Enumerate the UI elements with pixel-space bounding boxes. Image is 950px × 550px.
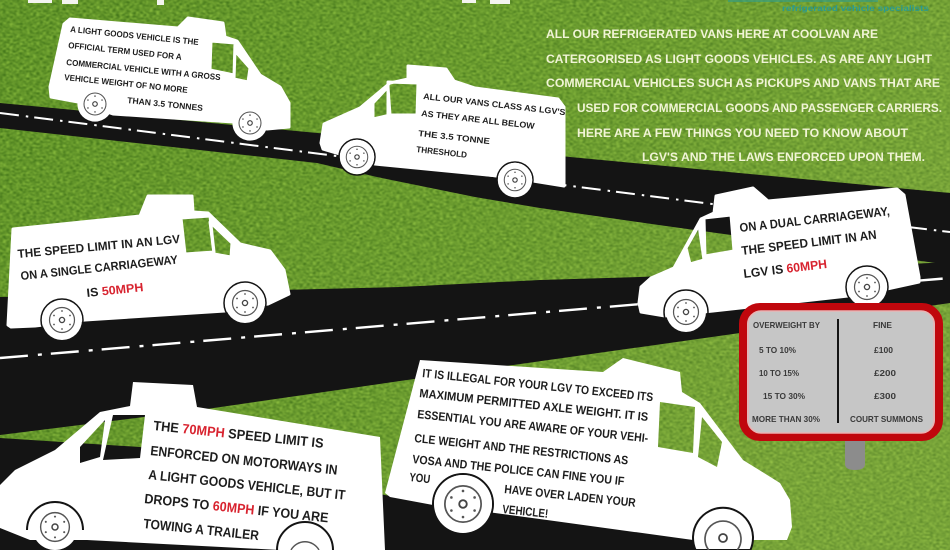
tagline: company logo text: refrigerated vehicle specialists — [782, 3, 929, 13]
van 6: axle weight warning: HAVE OVER LADEN YOUR — [504, 482, 637, 510]
sign: overweight fines table: 15 TO 30% — [763, 391, 805, 401]
van 6: axle weight warning: IT IS ILLEGAL FOR YOUR LGV TO EXCEED ITS — [422, 366, 654, 404]
van 2: LGV class threshold: THRESHOLD — [416, 144, 468, 160]
title remnants clipped at top edge — [28, 0, 510, 5]
van 3: single carriageway speed limit: ON A SINGLE CARRIAGEWAY — [20, 253, 178, 283]
van 1: definition of a light goods vehicle: THAN 3.5 TONNES — [127, 95, 204, 113]
van 6: axle weight warning: CLE WEIGHT AND THE RESTRICTIONS AS — [414, 431, 629, 467]
van 5: motorway speed limit: ENFORCED ON MOTORWAYS IN — [150, 443, 338, 478]
van 6: axle weight warning: ESSENTIAL YOU ARE AWARE OF YOUR VEHI- — [417, 407, 649, 445]
van 1: definition of a light goods vehicle — [50, 18, 289, 141]
sign: overweight fines table: OVERWEIGHT BY — [753, 320, 820, 330]
van 1: definition of a light goods vehicle: OFFICIAL TERM USED FOR A — [68, 40, 182, 62]
van 1: definition of a light goods vehicle: VEHICLE WEIGHT OF NO MORE — [64, 72, 188, 95]
van 6: axle weight warning: YOU — [409, 470, 431, 486]
text block: introduction: CATERGORISED AS LIGHT GOODS VEHICLES. AS ARE ANY LIGHT — [546, 52, 933, 66]
van 5: motorway speed limit: A LIGHT GOODS VEHICLE, BUT IT — [148, 467, 347, 503]
van 6: axle weight warning: VOSA AND THE POLICE CAN FINE YOU IF — [412, 452, 625, 488]
van 5: motorway speed limit — [0, 382, 385, 550]
text block: introduction: COMMERCIAL VEHICLES SUCH AS PICKUPS AND VANS THAT ARE — [546, 76, 940, 90]
text block: introduction: USED FOR COMMERCIAL GOODS AND PASSENGER CARRIERS. — [577, 101, 942, 115]
van 6: axle weight warning: VEHICLE! — [502, 502, 549, 521]
van 2: LGV class threshold: ALL OUR VANS CLASS AS LGV'S — [423, 91, 566, 117]
van 3: single carriageway speed limit: THE SPEED LIMIT IN AN LGV — [17, 232, 181, 261]
sign: overweight fines table — [743, 307, 939, 437]
text block: introduction — [546, 27, 942, 164]
sign: overweight fines table: MORE THAN 30% — [752, 414, 820, 424]
sign: overweight fines table: £100 — [874, 345, 893, 355]
sign post — [845, 440, 865, 470]
van 1: definition of a light goods vehicle: COMMERCIAL VEHICLE WITH A GROSS — [66, 57, 221, 82]
text block: introduction: LGV'S AND THE LAWS ENFORCED UPON THEM. — [642, 150, 925, 164]
road: middle — [0, 262, 950, 435]
van 2: LGV class threshold — [321, 66, 566, 198]
van 4: dual carriageway speed limit: THE SPEED LIMIT IN AN — [741, 228, 877, 258]
road: upper — [0, 103, 950, 265]
van 3: single carriageway speed limit: IS 50MPH — [86, 280, 144, 300]
van 6: axle weight warning: MAXIMUM PERMITTED AXLE WEIGHT. IT IS — [419, 386, 649, 424]
van 4: dual carriageway speed limit: ON A DUAL CARRIAGEWAY, — [739, 204, 890, 235]
van 5: motorway speed limit: TOWING A TRAILER — [143, 516, 260, 543]
van 3: single carriageway speed limit — [8, 196, 289, 341]
sign: overweight fines table: £300 — [874, 391, 896, 401]
van 4: dual carriageway speed limit — [639, 188, 919, 334]
van 5: motorway speed limit: THE 70MPH SPEED LIMIT IS — [153, 418, 324, 451]
sign: overweight fines table: £200 — [874, 368, 896, 378]
sign: overweight fines table: 10 TO 15% — [759, 368, 799, 378]
sign: overweight fines table: 5 TO 10% — [759, 345, 796, 355]
text block: introduction: ALL OUR REFRIGERATED VANS HERE AT COOLVAN ARE — [546, 27, 878, 41]
van 5: motorway speed limit: DROPS TO 60MPH IF YOU ARE — [144, 491, 329, 525]
sign: overweight fines table: FINE — [873, 320, 892, 330]
sign: overweight fines table: COURT SUMMONS — [850, 414, 923, 424]
text block: introduction: HERE ARE A FEW THINGS YOU NEED TO KNOW ABOUT — [577, 126, 909, 140]
van 2: LGV class threshold: AS THEY ARE ALL BELOW — [421, 108, 536, 131]
van 1: definition of a light goods vehicle: A LIGHT GOODS VEHICLE IS THE — [70, 24, 199, 47]
road: lower — [0, 438, 740, 550]
van 2: LGV class threshold: THE 3.5 TONNE — [418, 128, 491, 146]
van 4: dual carriageway speed limit: LGV IS 60MPH — [743, 257, 828, 281]
van 6: axle weight warning — [385, 358, 792, 550]
